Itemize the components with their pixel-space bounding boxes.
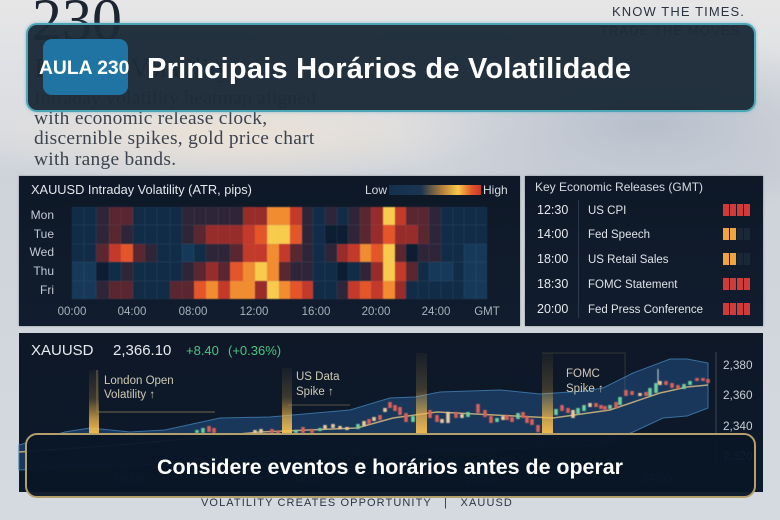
callout: London Open [97,370,215,412]
price axis: 2,320 [723,449,753,463]
time axis: 24:00 [642,471,672,485]
description text [34,88,316,170]
releases title: Key Economic Releases (GMT) [535,180,703,194]
lesson badge [43,39,128,95]
release: Fed Speech: 14:00 [537,227,568,241]
time axis [115,471,672,485]
releases divider [578,200,579,318]
callout: FOMC Spike [542,353,625,395]
chart background [19,333,763,492]
chart header: +8.40 [186,343,219,358]
callout: London Open: London Open [104,375,174,387]
spike columns [89,353,553,433]
legend: low to high: High [483,183,508,197]
callout: London Open: Volatility ↑ [104,389,155,401]
release: US Retail Sales: 18:00 [537,252,568,266]
price axis: 2,380 [723,358,753,372]
release: FOMC Statement: FOMC Statement [588,279,677,291]
candlesticks [197,369,708,434]
callout: FOMC Spike: Spike ↑ [566,383,604,395]
heatmap title: XAUUSD Intraday Volatility (ATR, pips) [31,182,252,197]
title banner [26,23,756,112]
price axis [716,352,753,466]
release: FOMC Statement: 18:30 [537,277,568,291]
heatmap day labels: Wed [30,245,54,259]
heatmap day labels [30,208,54,297]
chart header: (+0.36%) [228,343,281,358]
bottom strapline: VOLATILITY CREATES OPPORTUNITY | XAUUSD [201,497,513,509]
text: 16:00 [302,306,330,318]
tagline: KNOW THE TIMES. [612,4,745,19]
legend: low to high: Low [365,183,387,197]
background subtitle behind banner: Intraday Volatility [34,53,230,83]
heatmap day labels: Fri [40,283,54,297]
tagline [600,4,745,38]
main title: Principais Horários de Volatilidade [147,53,631,85]
release: Fed Press Conference: 20:00 [537,302,568,316]
callout: FOMC Spike: FOMC [566,368,600,380]
legend: low to high [365,183,508,197]
release: US Retail Sales: US Retail Sales [588,254,669,266]
text: 24:00 [422,306,450,318]
release: Fed Press Conference: Fed Press Conference [588,304,703,316]
heatmap day labels: Thu [33,264,54,278]
release: Fed Speech [537,227,750,241]
lesson badge label: AULA 230 [39,58,129,79]
tagline: TRADE THE MOVES. [600,23,745,38]
text: 12:00 [240,306,268,318]
callout: US Data Spike [288,371,350,405]
panel: key economic releases [525,176,763,326]
callout: US Data Spike: Spike ↑ [296,386,334,398]
release: FOMC Statement [537,277,750,291]
footer message: Considere eventos e horários antes de operar [157,455,623,479]
description text: with economic release clock, [34,108,267,129]
release: US CPI [537,203,750,217]
description text: Intraday volatility heatmap aligned [34,88,316,109]
footer banner [25,433,756,498]
moving average line [19,385,708,452]
heatmap day labels: Tue [34,227,54,241]
release: US Retail Sales [537,252,750,266]
text: 20:00 [362,306,390,318]
text: 00:00 [58,306,86,318]
heatmap day labels: Mon [31,208,54,222]
description text: discernible spikes, gold price chart [34,128,315,149]
release: Fed Press Conference [537,302,750,316]
panel: intraday volatility heatmap [19,176,520,326]
text: 08:00 [179,306,207,318]
price axis: 2,340 [723,419,753,433]
text: GMT [474,306,500,318]
text: 04:00 [118,306,146,318]
release: US CPI: 12:30 [537,203,568,217]
chart header: XAUUSD [31,342,94,359]
heatmap time axis [58,306,500,318]
range band [19,359,708,470]
chart header [31,342,281,359]
heatmap cells [72,206,488,300]
time axis: 06:00 [115,471,145,485]
release: Fed Speech: Fed Speech [588,229,650,241]
description text: with range bands. [34,149,176,170]
release: US CPI: US CPI [588,205,626,217]
chart header: 2,366.10 [113,342,171,359]
price axis: 2,360 [723,388,753,402]
callout: US Data Spike: US Data [296,371,340,383]
time axis: 18:00 [465,471,495,485]
time axis: 12:00 [293,471,323,485]
